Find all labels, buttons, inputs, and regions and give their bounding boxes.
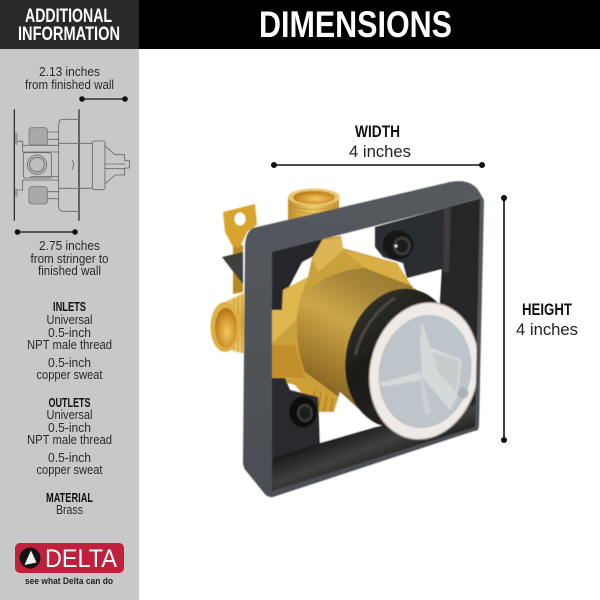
label: height: HEIGHT xyxy=(522,301,572,319)
label: height: 4 inches xyxy=(516,320,578,339)
left inlet pipe xyxy=(210,292,246,354)
bottom screw xyxy=(289,396,317,428)
top-left inner wall xyxy=(272,236,325,310)
text block: inlets: 0.5-inch xyxy=(48,325,91,340)
bottom inner wall xyxy=(272,404,477,492)
text block: material xyxy=(46,491,93,517)
text block: outlets xyxy=(27,396,112,477)
dimension label: 2.75 inches: 2.75 inches xyxy=(39,238,100,253)
top outlet pipe xyxy=(288,188,340,226)
text block: outlets: NPT male thread xyxy=(27,432,112,447)
header: additional information: INFORMATION xyxy=(18,24,120,45)
grey cap xyxy=(368,306,482,437)
arrow: width line xyxy=(271,162,485,168)
dimension label: 2.13 inches: from finished wall xyxy=(25,77,114,92)
dimension label: 2.13 inches xyxy=(25,64,114,92)
dimension label: 2.75 inches: finished wall xyxy=(38,263,101,278)
dimension label: 2.75 inches xyxy=(30,238,108,278)
text block: outlets: Universal xyxy=(46,407,93,422)
top mount plate xyxy=(375,208,445,278)
text block: inlets: copper sweat xyxy=(36,367,103,382)
bottom-left mount block xyxy=(272,378,320,458)
arrow: height line xyxy=(501,195,507,443)
text block: outlets: OUTLETS xyxy=(48,396,90,410)
measure line: 2.75 inches xyxy=(15,229,78,235)
text block: inlets: 0.5-inch xyxy=(48,355,91,370)
window: bottom gap xyxy=(320,392,375,443)
dark seal sleeve xyxy=(333,278,467,438)
label: height xyxy=(516,301,578,339)
label: width: WIDTH xyxy=(355,123,400,141)
dimension label: 2.13 inches: 2.13 inches xyxy=(39,64,100,79)
label: width: 4 inches xyxy=(349,142,411,161)
panel: additional information sidebar xyxy=(0,49,139,600)
text block: outlets: 0.5-inch xyxy=(48,450,91,465)
chrome ring xyxy=(357,292,491,450)
logo: Delta xyxy=(15,543,124,586)
cap cross ribs xyxy=(380,322,468,414)
valve body xyxy=(270,236,440,423)
diagram: valve side section xyxy=(14,109,129,221)
product photo: valve in mounting frame xyxy=(210,181,491,497)
header: dimensions title xyxy=(139,0,600,49)
text block: inlets: NPT male thread xyxy=(27,337,112,352)
top screw xyxy=(382,230,414,260)
header: additional information: ADDITIONAL xyxy=(25,6,112,27)
text block: inlets: INLETS xyxy=(53,300,86,314)
dimension label: 2.75 inches: from stringer to xyxy=(30,251,108,266)
logo: Delta: see what Delta can do xyxy=(25,576,113,586)
logo: Delta: DELTA xyxy=(45,545,117,573)
text block: outlets: copper sweat xyxy=(36,462,103,477)
text block: inlets xyxy=(27,300,112,382)
right inner wall xyxy=(440,198,481,440)
header: additional information xyxy=(0,0,139,49)
text block: inlets: Universal xyxy=(46,312,93,327)
measure line: 2.13 inches xyxy=(79,96,128,102)
frame front face xyxy=(243,181,484,497)
label: width xyxy=(349,123,411,161)
mounting tab xyxy=(222,204,257,294)
header: dimensions title: DIMENSIONS xyxy=(259,3,452,45)
window: right gap xyxy=(413,270,441,296)
window: top gap xyxy=(342,238,365,263)
text block: material: MATERIAL xyxy=(46,491,93,505)
text block: outlets: 0.5-inch xyxy=(48,420,91,435)
text block: material: Brass xyxy=(56,502,83,517)
